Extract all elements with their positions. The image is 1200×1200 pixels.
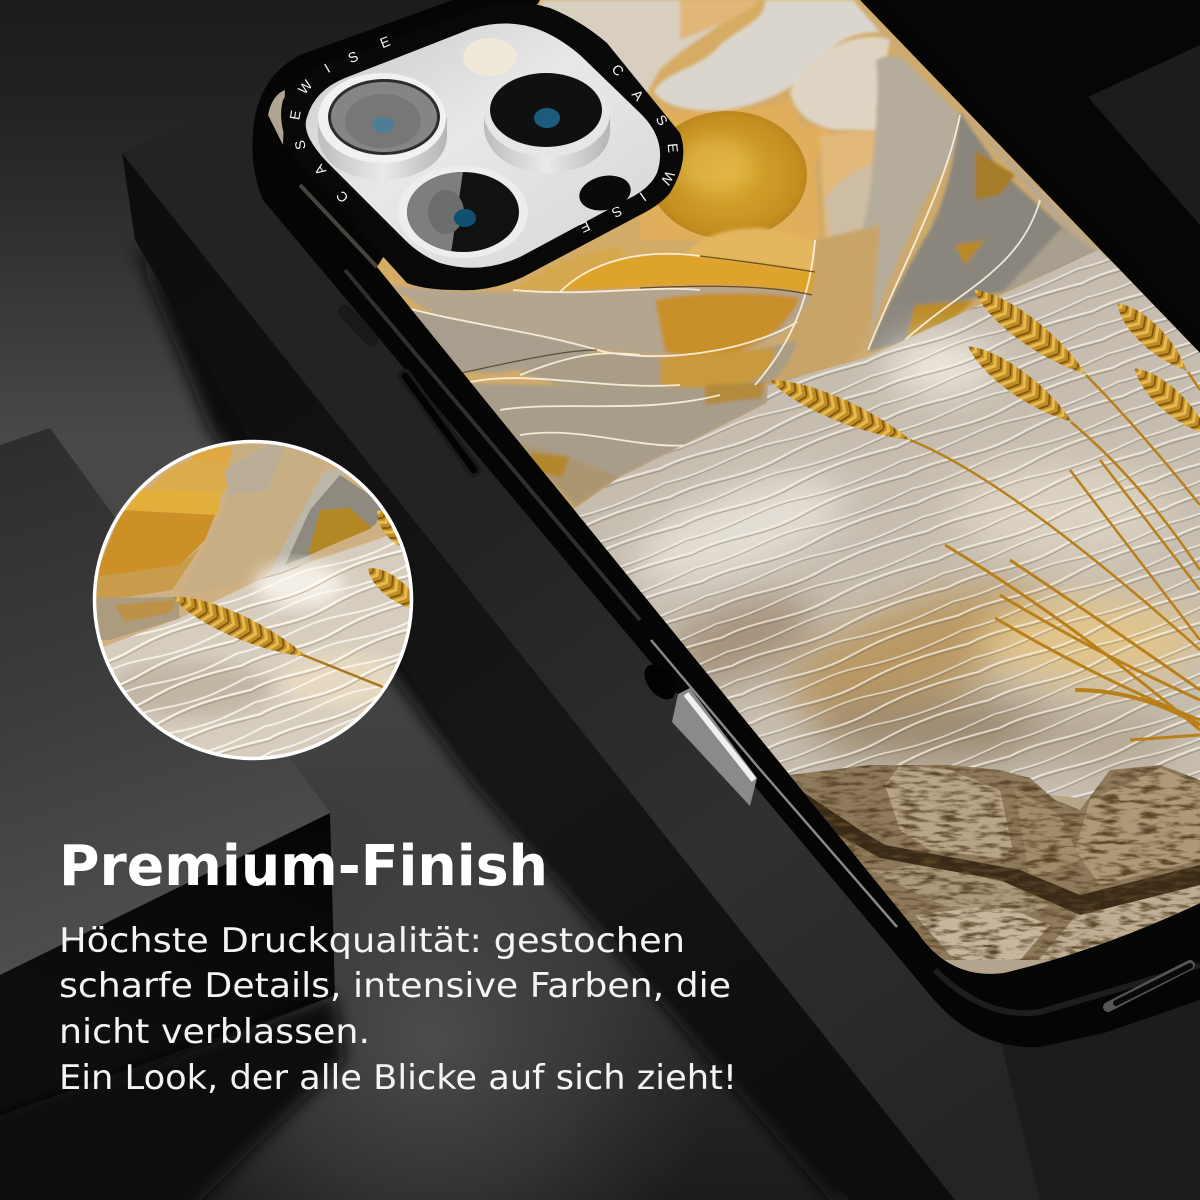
ring lettering left: [286, 33, 392, 206]
description text: Ein Look, der alle Blicke auf sich zieht!: [59, 1058, 737, 1098]
rocks: [790, 765, 1200, 960]
ring lettering right: [577, 61, 681, 236]
upper right dark block: [860, 0, 1200, 360]
ring lettering left: S: [345, 48, 361, 66]
ridge highlights: [403, 115, 1040, 446]
ring lettering right: W: [657, 168, 678, 188]
ring lettering right: A: [629, 86, 648, 104]
ring lettering right: C: [609, 61, 627, 79]
ring lettering left: C: [333, 188, 351, 206]
ring lettering left: E: [378, 33, 392, 51]
ring lettering right: E: [577, 218, 593, 236]
ring lettering right: S: [653, 112, 671, 128]
ring lettering left: I: [321, 60, 333, 76]
gold and silver bands: [385, 228, 815, 507]
description text: [59, 921, 737, 1098]
ring lettering right: I: [637, 189, 649, 205]
silver wave field: [573, 250, 1200, 810]
magnified detail circle: [90, 440, 430, 770]
camera glass: [306, 23, 660, 268]
lens right: [484, 69, 610, 173]
camera ring: [281, 2, 683, 290]
case body: [252, 0, 1200, 1047]
wheat stalks and ears: [910, 372, 1200, 740]
description text: Höchste Druckqualität: gestochen: [59, 921, 685, 961]
ring lettering left: W: [295, 76, 316, 97]
phone case: [252, 0, 1200, 1047]
lens bottom: [398, 165, 530, 260]
title: Premium-Finish: [59, 834, 548, 899]
ring lettering right: S: [609, 203, 625, 221]
grey mountain: [868, 112, 1098, 352]
left lower block: [0, 428, 345, 1200]
clouds and golden sky: [538, 0, 1102, 332]
camera module: [281, 2, 683, 290]
lens left: [318, 73, 447, 180]
ring lettering left: E: [286, 109, 304, 121]
ring lettering left: S: [291, 139, 309, 151]
ring lettering right: E: [665, 143, 681, 153]
side buttons: [345, 312, 1190, 1007]
gold hills: [192, 447, 232, 463]
silver waves: [104, 536, 410, 757]
golden sun disc: [649, 111, 807, 239]
wheat ears: [173, 510, 410, 656]
artwork: gold and silver landscape: [377, 0, 1200, 974]
flash: [463, 38, 517, 76]
description text: scharfe Details, intensive Farben, die: [59, 966, 731, 1006]
sensor: [576, 171, 634, 215]
description text: nicht verblassen.: [59, 1012, 370, 1052]
ring lettering left: A: [310, 161, 329, 178]
